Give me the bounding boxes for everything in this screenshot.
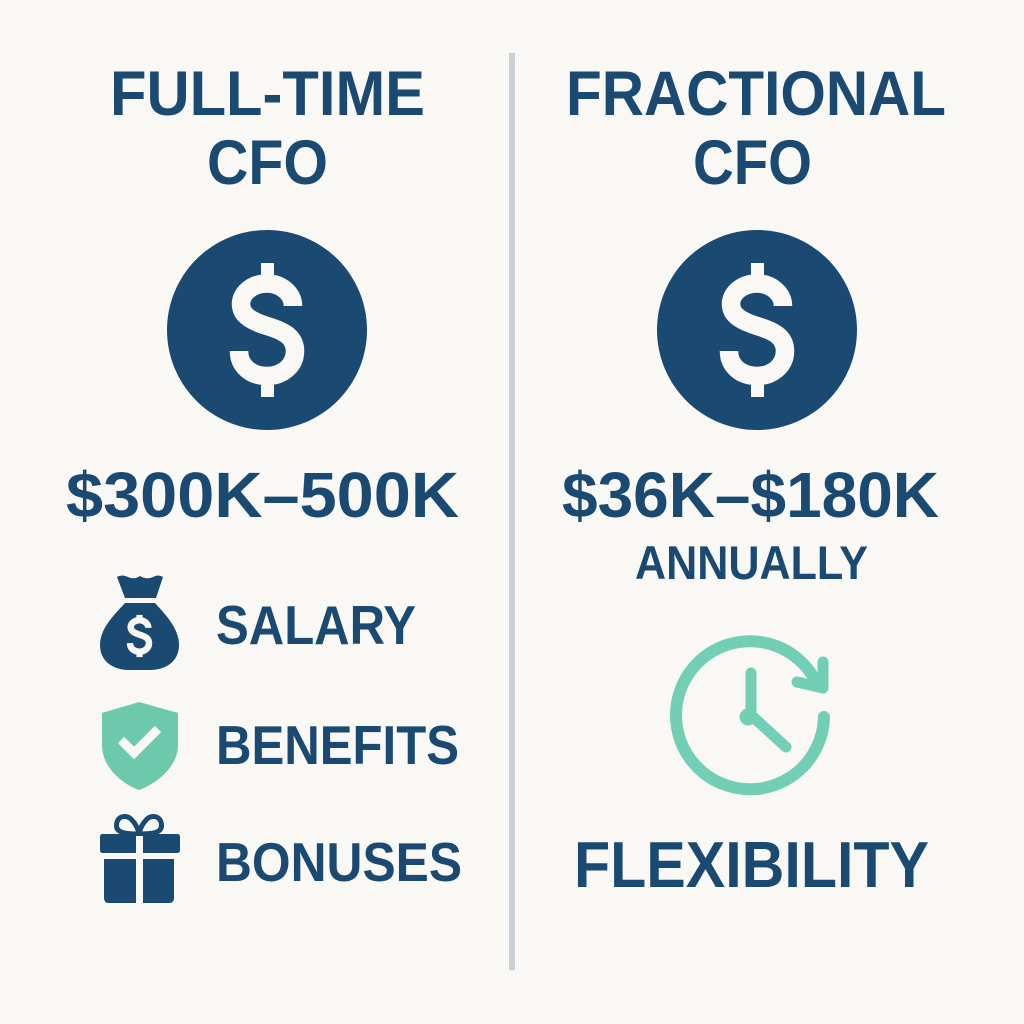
price: full-time: $300K–500K [66,459,459,531]
label: benefits: BENEFITS [216,714,459,776]
heading: full-time CFO [110,59,425,198]
icon: gift [100,817,180,904]
panel: fractional CFO [562,59,946,901]
icon: dollar coin [167,230,367,430]
heading: full-time CFO: FULL-TIME [110,59,425,129]
icon: money bag [100,576,179,670]
heading: fractional CFO: FRACTIONAL [566,59,946,129]
icon: shield check [102,702,178,790]
icon: dollar coin [657,230,857,430]
heading: fractional CFO [566,59,946,198]
icon: clock with arrow [676,641,824,789]
label: annually: ANNUALLY [635,536,868,589]
label: salary: SALARY [216,594,416,656]
panel: full-time CFO [66,59,462,904]
heading: full-time CFO: CFO [207,128,328,198]
price: fractional: $36K–$180K [562,459,939,531]
label: flexibility: FLEXIBILITY [574,828,929,901]
heading: fractional CFO: CFO [693,128,812,198]
label: bonuses: BONUSES [216,831,462,893]
